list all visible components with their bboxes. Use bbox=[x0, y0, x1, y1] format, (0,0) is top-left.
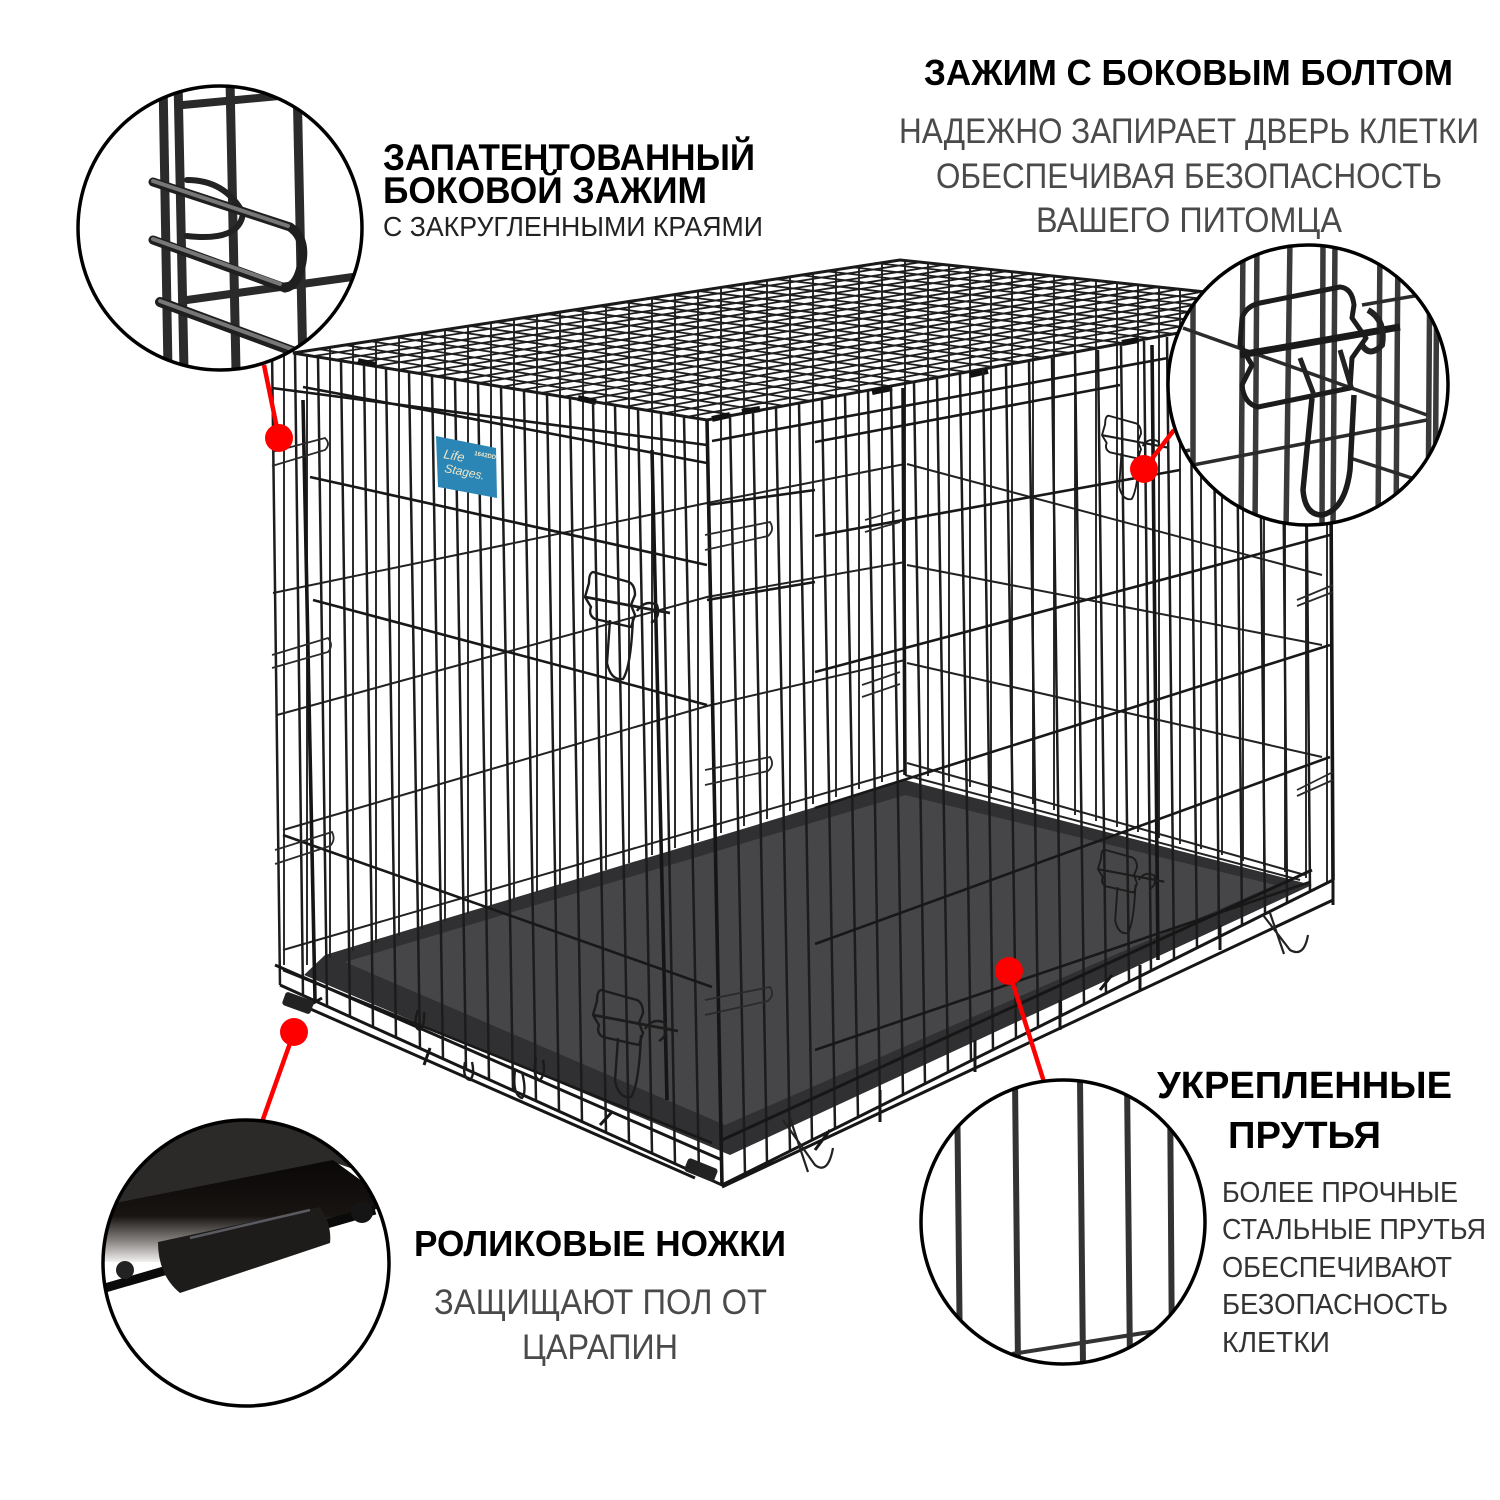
product tag: Stages. bbox=[443, 461, 486, 483]
tray hooks bbox=[415, 1010, 544, 1098]
text block: side clamp: ЗАПАТЕНТОВАННЫЙ bbox=[383, 136, 755, 178]
detail circle: side clamp bbox=[78, 80, 362, 370]
text block: reinforced wires: БЕЗОПАСНОСТЬ bbox=[1222, 1289, 1448, 1321]
detail circle: slide bolt bbox=[1168, 240, 1448, 530]
text block: side clamp: БОКОВОЙ ЗАЖИМ bbox=[383, 169, 707, 211]
left door wires bbox=[272, 350, 699, 1174]
text block: slide bolt: ВАШЕГО ПИТОМЦА bbox=[1036, 201, 1343, 240]
detail circle: wires bbox=[921, 1080, 1205, 1365]
door rails bbox=[272, 358, 1330, 1143]
hook: right bbox=[1263, 913, 1308, 954]
text block: slide bolt bbox=[899, 52, 1479, 240]
cage illustration bbox=[272, 260, 1333, 1187]
roof frame bbox=[293, 260, 1330, 420]
text block: roller feet bbox=[414, 1223, 786, 1367]
base frame and skid bbox=[275, 870, 1333, 1187]
text block: side clamp: С ЗАКРУГЛЕННЫМИ КРАЯМИ bbox=[383, 211, 763, 242]
text block: reinforced wires: ОБЕСПЕЧИВАЮТ bbox=[1222, 1252, 1452, 1284]
corner posts and door edges bbox=[303, 306, 1333, 1185]
right door wires bbox=[730, 312, 1310, 1174]
door latch: right bottom bbox=[1098, 850, 1164, 933]
text block: roller feet: ЗАЩИЩАЮТ ПОЛ ОТ bbox=[434, 1283, 767, 1322]
product tag bbox=[436, 436, 497, 498]
text block: reinforced wires bbox=[1157, 1065, 1486, 1359]
red marker: wires bbox=[995, 957, 1044, 1082]
text block: reinforced wires: СТАЛЬНЫЕ ПРУТЬЯ bbox=[1222, 1214, 1486, 1246]
door latch: left top bbox=[585, 572, 670, 679]
text block: side clamp bbox=[383, 136, 763, 242]
red marker: side clamp bbox=[264, 365, 293, 452]
back wall wires bbox=[284, 260, 1327, 965]
detail circle: roller feet bbox=[100, 1110, 400, 1406]
text block: reinforced wires: УКРЕПЛЕННЫЕ bbox=[1157, 1065, 1452, 1107]
text block: roller feet: РОЛИКОВЫЕ НОЖКИ bbox=[414, 1223, 786, 1264]
roller foot: front bbox=[684, 1158, 718, 1182]
door latch: left bottom bbox=[593, 990, 678, 1097]
hook: front bbox=[783, 1118, 833, 1172]
text block: roller feet: ЦАРАПИН bbox=[522, 1328, 678, 1367]
text block: reinforced wires: КЛЕТКИ bbox=[1222, 1327, 1330, 1359]
text block: slide bolt: ЗАЖИМ С БОКОВЫМ БОЛТОМ bbox=[924, 52, 1453, 93]
back wall rails bbox=[273, 464, 1322, 950]
text block: slide bolt: ОБЕСПЕЧИВАЯ БЕЗОПАСНОСТЬ bbox=[936, 157, 1442, 196]
floor tray bbox=[304, 780, 1312, 1155]
text block: reinforced wires: БОЛЕЕ ПРОЧНЫЕ bbox=[1222, 1177, 1458, 1209]
red marker: slide bolt bbox=[1130, 430, 1174, 483]
roller foot: left bbox=[282, 991, 314, 1015]
slot connectors bbox=[272, 438, 1333, 1015]
product tag: 1642DD bbox=[474, 451, 497, 461]
roof grid bbox=[314, 262, 1309, 417]
product tag: Life bbox=[442, 446, 466, 465]
red marker: roller feet bbox=[262, 1018, 308, 1122]
text block: reinforced wires: ПРУТЬЯ bbox=[1228, 1115, 1381, 1157]
door latch: right top bbox=[1102, 416, 1168, 499]
roof clips bbox=[358, 340, 1138, 419]
